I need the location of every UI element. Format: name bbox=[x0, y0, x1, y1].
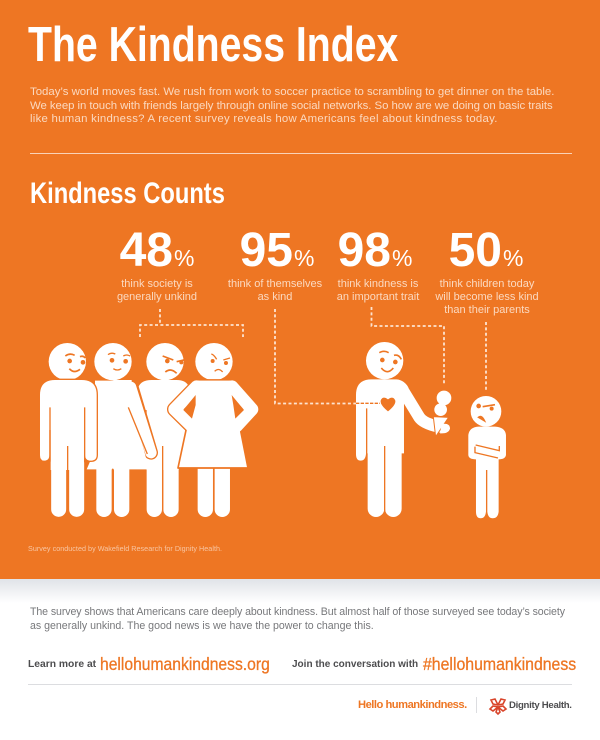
connector: 50% to child bbox=[485, 322, 487, 390]
stat: 98% bbox=[337, 224, 420, 303]
stat: 98%: an important trait bbox=[337, 291, 419, 303]
intro text: Today’s world moves fast. We rush from work to soccer practice to scrambling to get dinner on the table. bbox=[30, 86, 554, 98]
tagline: Hello humankindness. bbox=[358, 699, 467, 711]
stat: 95% bbox=[228, 224, 322, 303]
stat: 50%: think children today bbox=[440, 278, 534, 290]
stat: 48%: think society is bbox=[121, 278, 193, 290]
figure 1: smiling man bbox=[40, 343, 97, 512]
stat: 95%: as kind bbox=[258, 291, 292, 303]
stat: 48%: generally unkind bbox=[117, 291, 197, 303]
title: The Kindness Index bbox=[28, 18, 398, 72]
intro text: We keep in touch with friends largely through online social networks. So how are we doing on basic traits bbox=[30, 100, 553, 112]
icon: heart bbox=[381, 398, 395, 411]
stat: 95%: think of themselves bbox=[228, 278, 322, 290]
conclusion text: as generally unkind. The good news is we have the power to change this. bbox=[30, 620, 374, 632]
panel: orange header background bbox=[0, 0, 600, 579]
call to action: hashtag bbox=[292, 654, 576, 674]
stat: 98%: think kindness is bbox=[338, 278, 418, 290]
stat: 98%: 98% bbox=[338, 224, 412, 277]
logo: Dignity Health: Dignity Health. bbox=[509, 700, 572, 711]
stat: 95%: 95% bbox=[240, 224, 314, 277]
intro text: like human kindness? A recent survey reveals how Americans feel about kindness today. bbox=[30, 113, 498, 125]
survey footnote: Survey conducted by Wakefield Research for Dignity Health. bbox=[28, 544, 222, 553]
conclusion text bbox=[30, 606, 565, 632]
stat: 50% bbox=[435, 224, 539, 316]
connector: 95% to heart bbox=[275, 309, 378, 404]
stat: 48%: 48% bbox=[120, 224, 194, 277]
call to action: hashtag: #hellohumankindness bbox=[423, 654, 576, 674]
connector: bracket over group bbox=[140, 309, 243, 337]
call to action: website: Learn more at bbox=[28, 659, 96, 670]
stat: 50%: than their parents bbox=[444, 304, 530, 316]
man with heart and ice cream bbox=[356, 342, 451, 513]
call to action: website: hellohumankindness.org bbox=[100, 654, 270, 674]
logo: Dignity Health bbox=[488, 698, 572, 715]
icon: logo star bbox=[488, 698, 508, 715]
stat: 48% bbox=[117, 224, 197, 303]
figure 2: smiling woman bbox=[87, 343, 151, 512]
illustration: people and connectors bbox=[40, 307, 506, 518]
figure 3: angry man bbox=[137, 343, 190, 512]
child with crossed arms bbox=[468, 396, 506, 518]
stat: 50%: 50% bbox=[449, 224, 523, 277]
panel: lower gradient band bbox=[0, 579, 600, 603]
section heading: Kindness Counts bbox=[30, 177, 225, 210]
stat: 50%: will become less kind bbox=[435, 291, 539, 303]
call to action: hashtag: Join the conversation with bbox=[292, 659, 418, 670]
figure 4: angry woman with hands on hips bbox=[175, 343, 252, 512]
group of four figures bbox=[40, 343, 252, 512]
intro text bbox=[30, 86, 554, 125]
icon: ice cream bbox=[433, 391, 451, 437]
conclusion text: The survey shows that Americans care deeply about kindness. But almost half of those surveyed see today’s society bbox=[30, 606, 565, 618]
connector: 98% to ice cream bbox=[372, 307, 444, 384]
